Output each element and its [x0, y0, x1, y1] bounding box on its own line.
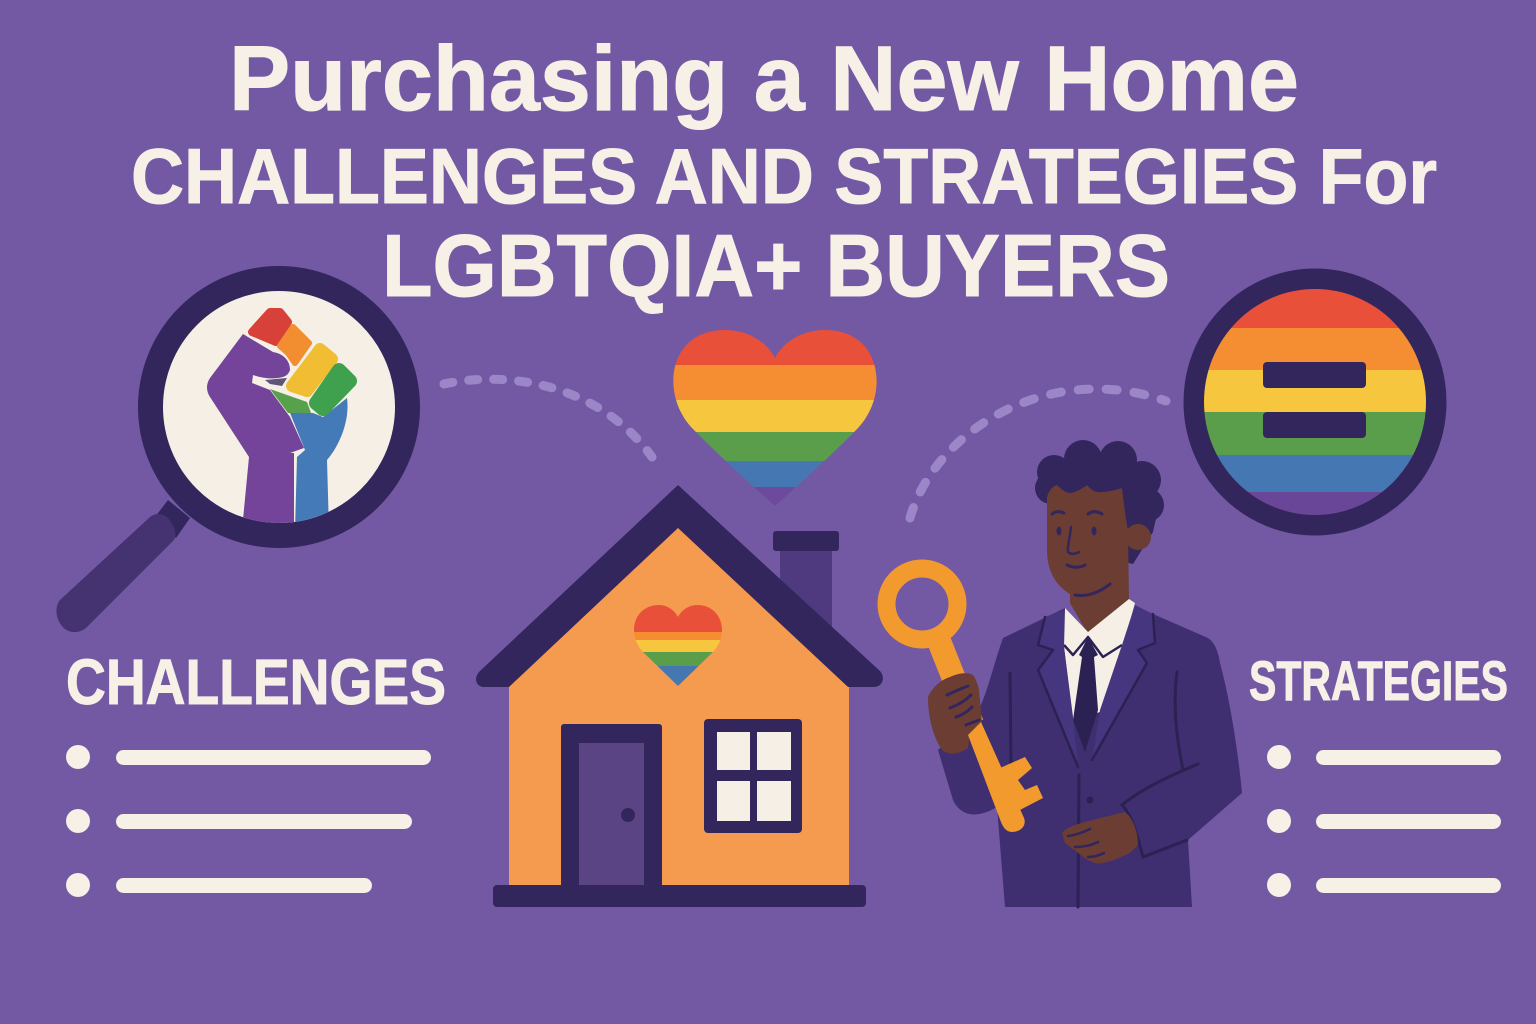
title line 2: CHALLENGES AND STRATEGIES For: [131, 132, 1437, 220]
door: [561, 724, 662, 889]
icon: circle ring: [1194, 279, 1436, 525]
heading: challenges: CHALLENGES: [66, 646, 446, 718]
icon: rainbow heart: [673, 330, 877, 506]
chimney: [773, 531, 839, 638]
challenges list placeholder: [66, 745, 431, 897]
dashed arc: left: [444, 379, 652, 457]
title: [131, 28, 1437, 315]
rainbow circle with equals sign: [1194, 279, 1436, 525]
ground base: [493, 885, 866, 907]
strategies list placeholder: [1267, 745, 1501, 897]
key ring and upper shaft: [886, 568, 972, 724]
finger lines: [947, 686, 979, 725]
shirt: [1064, 599, 1135, 720]
icon: magnifier handle: [56, 500, 190, 632]
icon: rainbow stripes: [1200, 285, 1430, 518]
title line 1: Purchasing a New Home: [229, 28, 1299, 130]
golden key: [886, 568, 1043, 832]
key shaft and teeth: [968, 722, 1043, 832]
ear: [1125, 524, 1151, 550]
house wall: [509, 520, 849, 888]
facial features: [1052, 512, 1110, 595]
face and neck: [1047, 485, 1129, 634]
hair back: [1035, 440, 1164, 564]
icon: equals sign: [1263, 362, 1366, 438]
small rainbow heart: [634, 605, 722, 686]
window: [704, 719, 802, 833]
lower hand: [1062, 812, 1138, 863]
house: [476, 485, 883, 907]
icon: magnifier lens: [150, 278, 408, 536]
collar line: [1064, 637, 1122, 657]
lapels: [1038, 605, 1155, 767]
icon: rainbow raised fist: [207, 312, 350, 530]
person with key: [886, 440, 1242, 907]
lower hand finger lines: [1068, 829, 1104, 857]
challenges column: [66, 646, 446, 897]
suit jacket: [938, 607, 1242, 907]
suit details: [1010, 672, 1198, 907]
title line 3: LGBTQIA+ BUYERS: [382, 216, 1170, 315]
dashed arc: right: [910, 389, 1166, 518]
tie: [1073, 637, 1098, 752]
magnifying glass with rainbow fist: [56, 278, 408, 632]
roof: [476, 485, 883, 687]
strategies column: [1249, 649, 1508, 897]
hand holding key: [928, 673, 982, 754]
